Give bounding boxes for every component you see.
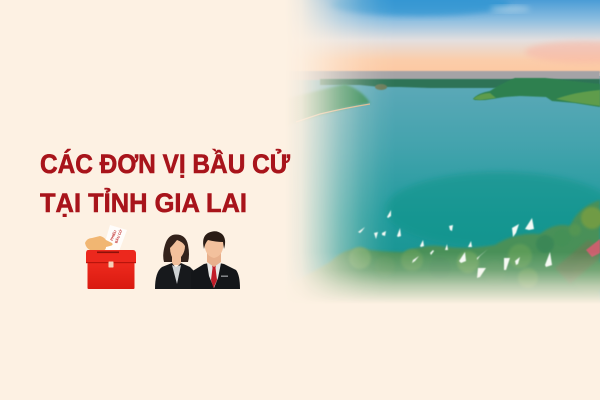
neck bbox=[207, 250, 221, 267]
foreground forest bbox=[313, 200, 600, 296]
jacket bbox=[155, 263, 196, 289]
ballot paper bbox=[103, 225, 127, 254]
small islet bbox=[375, 84, 387, 90]
water bbox=[292, 76, 600, 300]
photo: lake landscape bbox=[292, 0, 600, 302]
ballot paper: BẦU CỬ bbox=[113, 229, 123, 244]
title line 1: CÁC ĐƠN VỊ BẦU CỬ bbox=[40, 147, 291, 179]
neck and face bbox=[170, 240, 185, 265]
title line 2: TẠI TỈNH GIA LAI bbox=[40, 186, 247, 218]
tie bbox=[211, 264, 217, 288]
hand bbox=[85, 236, 113, 251]
ballot paper: PHIẾU bbox=[109, 229, 118, 241]
blouse bbox=[172, 265, 181, 284]
far shore forest bbox=[320, 79, 600, 90]
right peninsula bbox=[473, 78, 600, 107]
left headland bbox=[302, 84, 370, 118]
sky bbox=[270, 0, 600, 73]
bright teal water centre bbox=[385, 172, 600, 248]
box lid bbox=[86, 250, 136, 263]
box body bbox=[88, 262, 134, 289]
icon: ballot box bbox=[85, 225, 136, 289]
title bbox=[40, 147, 291, 218]
white egrets bbox=[358, 210, 552, 278]
shirt bbox=[207, 263, 221, 288]
hair bbox=[163, 234, 189, 262]
man bbox=[191, 231, 240, 289]
infographic canvas bbox=[40, 0, 600, 302]
lock bbox=[108, 262, 114, 268]
slot bbox=[97, 252, 119, 253]
pocket square bbox=[221, 276, 228, 277]
face bbox=[204, 237, 224, 258]
icon: man and woman candidates bbox=[155, 231, 240, 289]
jacket bbox=[191, 262, 240, 289]
woman bbox=[155, 234, 196, 289]
hair bbox=[203, 231, 225, 249]
peninsula highlights bbox=[473, 90, 600, 106]
distant city bbox=[270, 71, 600, 80]
